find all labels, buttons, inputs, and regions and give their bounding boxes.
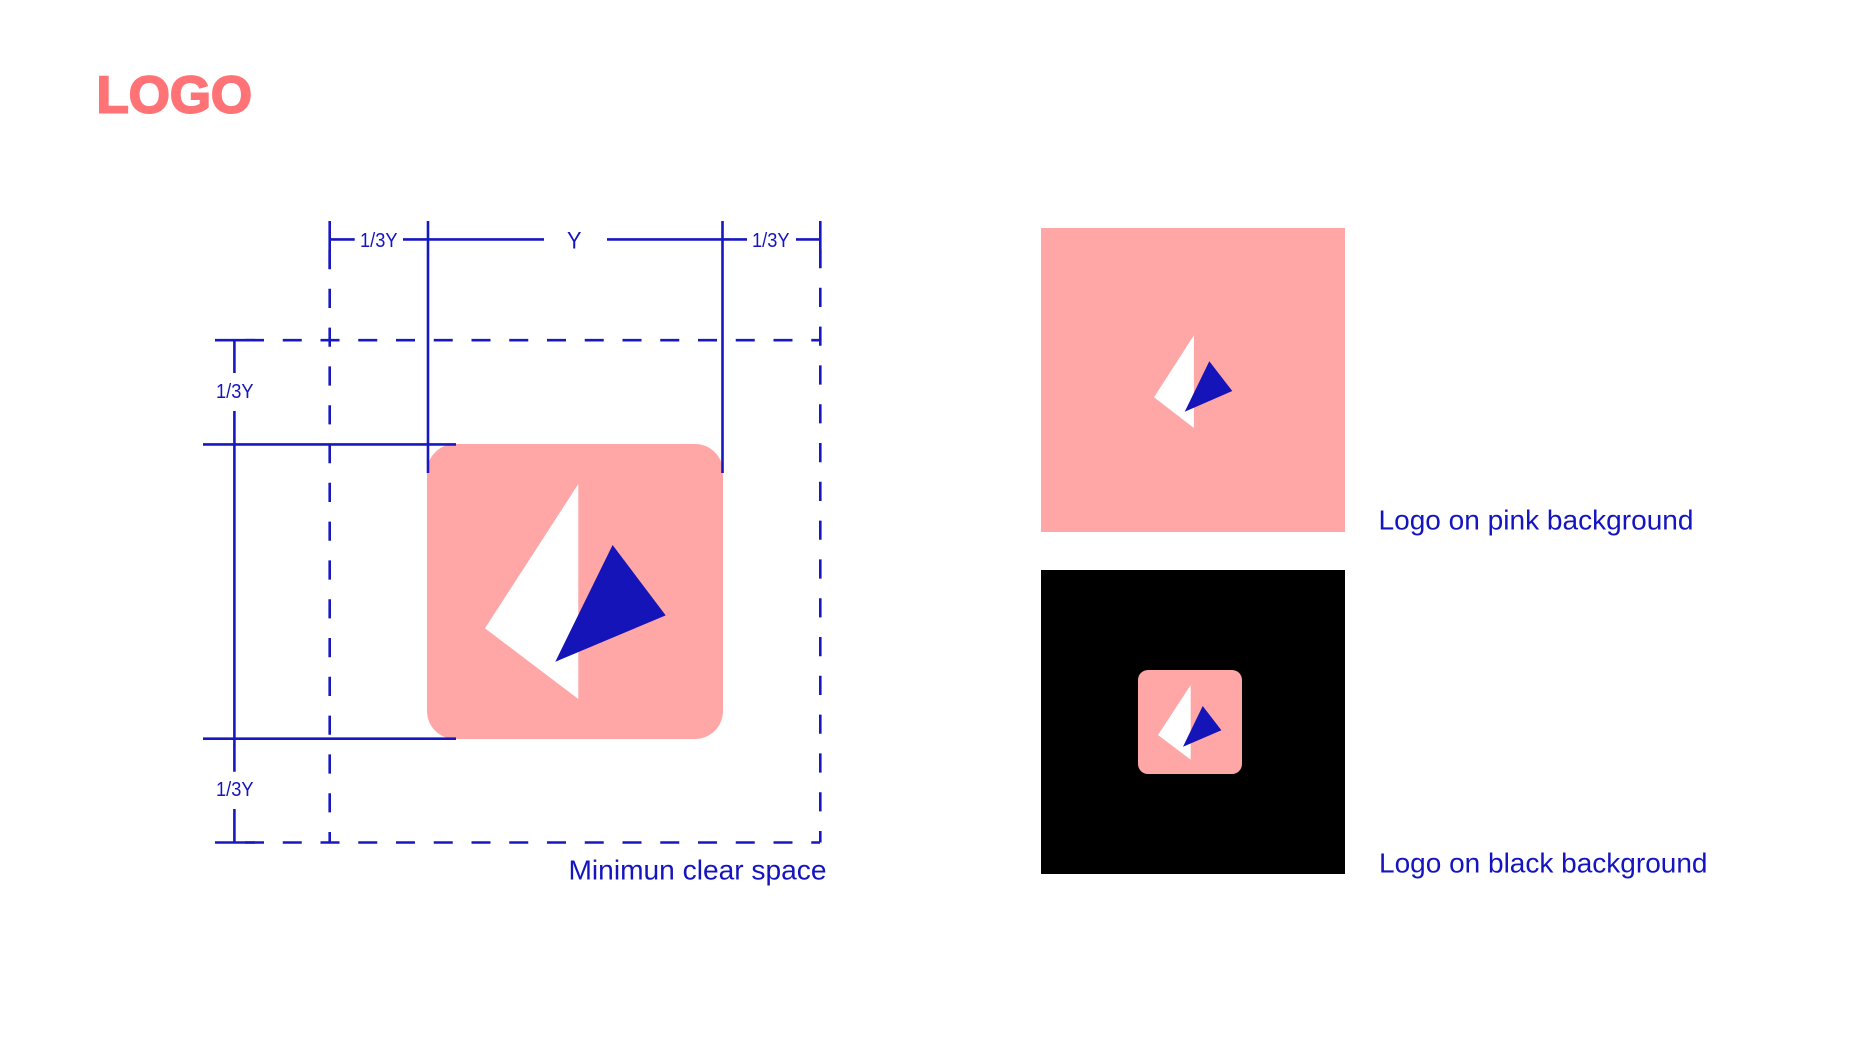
logo mark on pink [1154, 335, 1232, 428]
title: LOGO [96, 66, 252, 124]
label: left upper 1/3Y: 1/3Y [216, 381, 254, 403]
caption: minimum clear space: Minimun clear space [568, 854, 826, 886]
panel: minimum clear space diagram [203, 221, 826, 886]
label: Y: Y [567, 228, 582, 254]
label: top left 1/3Y: 1/3Y [360, 230, 398, 252]
label: top right 1/3Y: 1/3Y [752, 230, 790, 252]
left dimension lines [203, 340, 456, 842]
label: left lower 1/3Y: 1/3Y [216, 779, 254, 801]
clear space dashed boundary [245, 249, 820, 842]
pink square [1041, 228, 1345, 532]
logo tile on black [1138, 670, 1242, 774]
panel: logo on pink background [1041, 228, 1694, 536]
logo tile [427, 444, 723, 739]
caption: black: Logo on black background [1379, 848, 1708, 878]
panel: logo on black background [1041, 570, 1708, 878]
caption: pink: Logo on pink background [1378, 504, 1694, 536]
top dimension lines [330, 221, 820, 473]
black square [1041, 570, 1345, 874]
